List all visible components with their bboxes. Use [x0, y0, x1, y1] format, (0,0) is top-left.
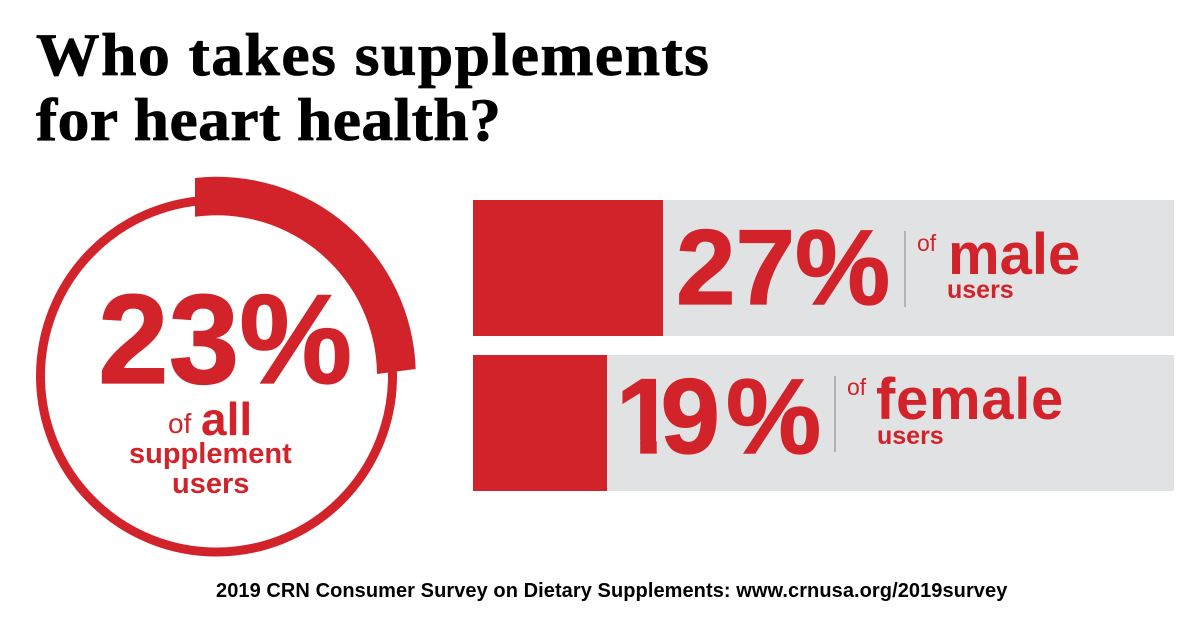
of: of — [168, 408, 191, 439]
9%: 9% — [660, 356, 821, 476]
female: female — [876, 367, 1064, 432]
title — [36, 22, 710, 153]
divider — [904, 231, 906, 307]
divider — [834, 376, 836, 452]
digit 1 without foot: 1 — [616, 356, 675, 476]
19% — [622, 356, 821, 476]
title: Who takes supplements — [36, 22, 710, 88]
of: of — [847, 374, 866, 400]
bar fill male — [473, 200, 663, 336]
panel: female bar — [473, 355, 1174, 491]
male: male — [948, 222, 1080, 287]
title: for heart health? — [36, 87, 501, 153]
panel: male bar — [473, 200, 1174, 336]
of: of — [917, 230, 936, 256]
users: users — [877, 422, 944, 450]
supplement: supplement — [129, 438, 292, 470]
bar fill female — [473, 355, 607, 491]
source line: 2019 CRN Consumer Survey on Dietary Supplements: www.crnusa.org/2019survey — [216, 580, 1007, 602]
big number: 23% — [98, 268, 352, 410]
all: all — [201, 393, 252, 445]
users: users — [172, 468, 249, 500]
donut label — [98, 268, 352, 500]
27%: 27% — [676, 207, 890, 327]
users: users — [947, 276, 1014, 304]
